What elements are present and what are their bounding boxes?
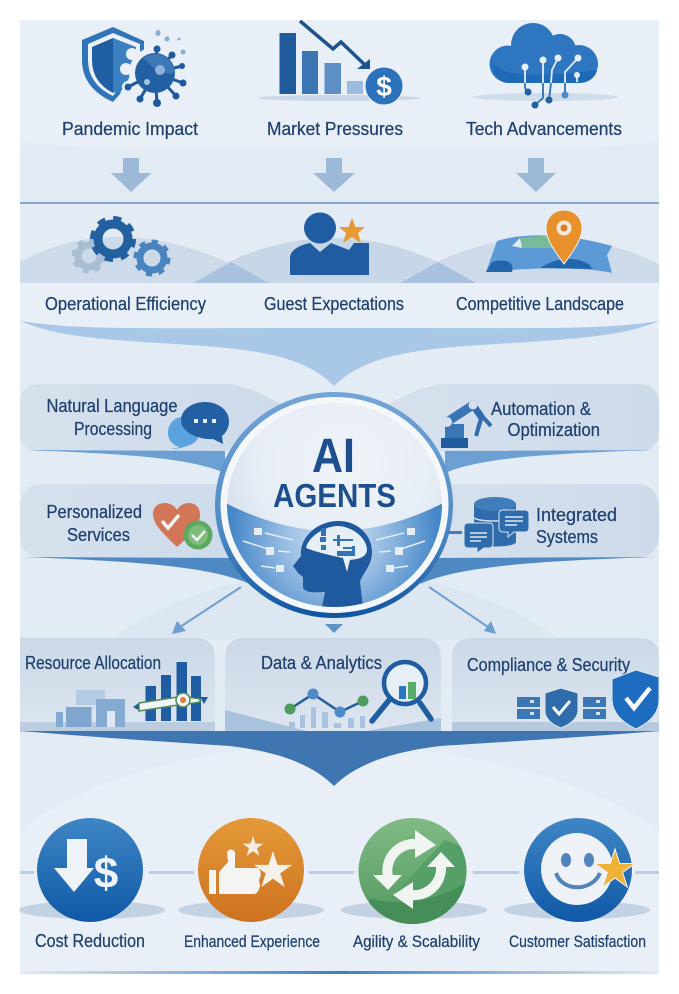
sphere lower blue field [227, 504, 442, 607]
label: Integrated Systems: Integrated [536, 505, 617, 525]
shadows under icons [19, 901, 650, 919]
icon: line chart and magnifier [284, 662, 431, 728]
arrow: down 2 [313, 158, 355, 192]
icon: heart with check [153, 503, 212, 550]
label: Personalized Services: Services [67, 525, 130, 545]
icon: cost reduction: $ [94, 849, 118, 898]
label: Agility & Scalability: Agility & Scalability [353, 932, 480, 951]
pill: natural language [20, 384, 290, 451]
top band background [20, 20, 659, 148]
icon: buildings and bars [56, 662, 208, 727]
icon: head with brain [293, 521, 372, 607]
section: drivers [20, 20, 659, 203]
label: Enhanced Experience: Enhanced Experience [184, 932, 320, 951]
label: Operational Efficiency: Operational Efficiency [45, 294, 206, 314]
icon: pandemic shield and virus [82, 27, 186, 107]
lower band background [20, 148, 659, 203]
label: Tech Advancements: Tech Advancements [466, 119, 622, 139]
section: capabilities [20, 384, 659, 640]
label: Natural Language Processing [46, 396, 178, 439]
label: Integrated Systems [536, 505, 617, 547]
label: Natural Language Processing: Processing [74, 419, 152, 439]
label: Resource Allocation: Resource Allocation [25, 653, 161, 673]
section: outcomes [19, 818, 659, 951]
icon: map with pin [486, 210, 612, 273]
label: Compliance & Security: Compliance & Security [467, 655, 630, 675]
pill: integrated [430, 484, 659, 558]
label: Customer Satisfaction: Customer Satisfaction [509, 932, 646, 951]
label: Personalized Services: Personalized [46, 502, 142, 522]
connector: lower left taper [24, 557, 250, 584]
connector line [20, 871, 659, 874]
label: Pandemic Impact: Pandemic Impact [62, 119, 198, 139]
title: AGENTS: AGENTS [273, 477, 396, 514]
arrow: down 1 [111, 158, 152, 192]
section: applications [20, 638, 659, 974]
arrow: down 3 [516, 158, 556, 192]
arrow: to resource allocation [172, 587, 241, 634]
label band [20, 283, 659, 328]
label: Natural Language Processing: Natural Language [46, 396, 178, 416]
icon: guest with star [290, 212, 369, 275]
label: Competitive Landscape: Competitive Landscape [456, 294, 624, 314]
arrow: to compliance [429, 587, 496, 634]
connector: lower right taper [420, 557, 655, 584]
card: data analytics [225, 638, 441, 732]
label: Automation & Optimization: Optimization [508, 420, 600, 440]
icon: enhanced experience [198, 818, 304, 922]
icon: market pressures chart [258, 21, 420, 106]
icon: market pressures chart: $ [376, 71, 392, 102]
pill: personalized [20, 484, 240, 558]
label: Market Pressures: Market Pressures [267, 119, 403, 139]
label: Data & Analytics: Data & Analytics [261, 653, 382, 673]
icon: cost reduction [37, 818, 143, 922]
central AI agents sphere [215, 392, 453, 620]
bottom lighter arc [20, 745, 659, 974]
funnel arrow to AI agents [20, 321, 659, 386]
icon: database and chat [446, 497, 529, 553]
hills background [20, 237, 659, 283]
backdrop arc [110, 570, 560, 640]
pill: automation [380, 384, 659, 451]
label: Integrated Systems: Systems [536, 527, 598, 547]
icon: robot arm [441, 400, 491, 448]
icon: tech cloud circuit [472, 23, 618, 108]
section: pressures [20, 210, 659, 328]
label: Personalized Services [46, 502, 142, 545]
icon: agility and scalability [358, 818, 466, 924]
connector: top left taper [24, 450, 225, 473]
label: Automation & Optimization [491, 399, 600, 440]
title: AI: AI [312, 430, 355, 483]
icon: gears [74, 219, 168, 274]
funnel arrow to outcomes [22, 731, 657, 786]
card: resource allocation [20, 638, 215, 732]
icon: chat bubbles [168, 402, 229, 449]
icon: servers and shields [517, 670, 659, 729]
connector: top right taper [445, 450, 655, 473]
label: Automation & Optimization: Automation & [491, 399, 591, 419]
arrow: to data analytics [325, 624, 343, 633]
label: Cost Reduction: Cost Reduction [35, 931, 145, 951]
label: Guest Expectations: Guest Expectations [264, 294, 404, 314]
card: compliance and security [452, 638, 659, 732]
icon: customer satisfaction [524, 818, 635, 922]
